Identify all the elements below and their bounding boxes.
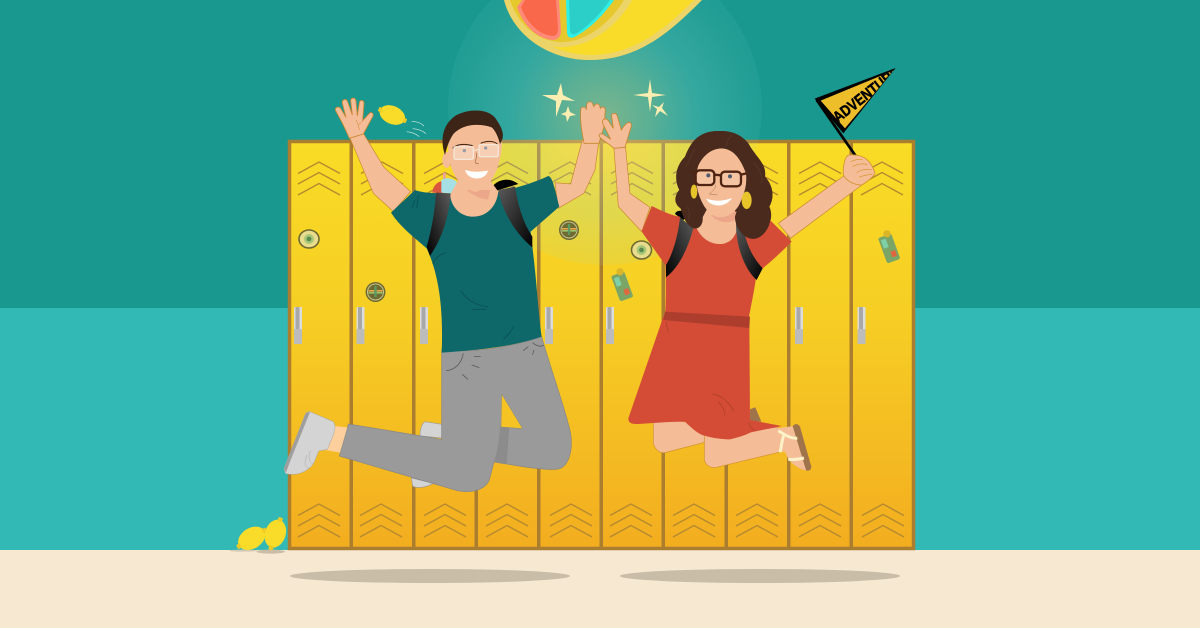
background: lower turquoise wall bbox=[0, 308, 1200, 551]
lemons on floor bbox=[229, 514, 290, 556]
eyes bbox=[706, 173, 710, 177]
eyes bbox=[463, 149, 466, 152]
ankle bbox=[325, 426, 347, 453]
belt bbox=[663, 312, 750, 328]
sparkles bbox=[542, 79, 668, 122]
backpack right strap bbox=[736, 223, 763, 280]
nose bbox=[709, 185, 717, 195]
trouser cuff bbox=[494, 427, 509, 464]
backpack left strap bbox=[666, 217, 693, 277]
back sandal bbox=[750, 407, 761, 422]
nose bbox=[475, 153, 479, 163]
pennant text: ADVENTURE bbox=[830, 64, 903, 126]
glasses bbox=[454, 145, 498, 159]
glasses bbox=[692, 170, 747, 186]
glow behind lemon slice bbox=[448, 0, 762, 265]
backpack top bbox=[675, 211, 707, 223]
skirt bbox=[628, 317, 782, 439]
flag pole bbox=[817, 100, 857, 157]
background: upper teal wall bbox=[0, 0, 1200, 308]
earrings bbox=[691, 185, 697, 199]
trousers silhouette bbox=[339, 337, 571, 492]
front shoe bbox=[284, 412, 335, 474]
bottle on backpack bbox=[432, 181, 443, 193]
man bbox=[284, 98, 605, 492]
right hand bbox=[843, 155, 875, 185]
flying lemon bbox=[375, 101, 426, 137]
sandal straps bbox=[778, 431, 804, 460]
eyebrows bbox=[453, 141, 497, 148]
hair top and side locks bbox=[676, 131, 772, 239]
hair back bbox=[675, 131, 772, 238]
ear bbox=[442, 152, 451, 168]
background: cream floor bbox=[0, 550, 1200, 628]
front leg bbox=[704, 427, 782, 468]
backpack shoulder bbox=[491, 180, 518, 192]
left arm bbox=[349, 133, 411, 212]
neck bbox=[697, 207, 738, 244]
woman lower: skirt and legs bbox=[628, 312, 811, 471]
t-shirt bbox=[391, 176, 559, 353]
face bbox=[448, 121, 502, 192]
back shoe bbox=[411, 422, 447, 487]
smile bbox=[465, 170, 488, 179]
hair bbox=[442, 110, 503, 155]
smile bbox=[706, 198, 732, 205]
gap between legs bbox=[501, 394, 523, 429]
neck bbox=[450, 180, 498, 217]
skirt folds bbox=[666, 322, 755, 431]
woman bbox=[599, 64, 903, 453]
lemon slice at top bbox=[504, 0, 702, 60]
backpack left strap bbox=[427, 193, 451, 256]
left arm bbox=[613, 140, 650, 232]
right arm bbox=[555, 140, 599, 208]
sandal sole bbox=[793, 424, 811, 471]
trouser creases bbox=[446, 343, 544, 379]
foot bbox=[777, 426, 810, 471]
left hand bbox=[599, 113, 631, 148]
motion lines bbox=[407, 121, 426, 137]
back leg bbox=[653, 407, 761, 453]
man: upper body bbox=[335, 98, 605, 353]
backpack right strap bbox=[498, 187, 532, 247]
stickers on lockers bbox=[299, 220, 900, 302]
red dress upper bbox=[642, 206, 792, 320]
lockers bbox=[290, 141, 914, 549]
left hand bbox=[335, 98, 373, 138]
right arm bbox=[778, 175, 863, 238]
man: legs and shoes bbox=[284, 337, 571, 492]
face bbox=[696, 148, 746, 217]
shirt creases bbox=[412, 195, 514, 339]
shadow under man bbox=[290, 569, 570, 583]
right hand bbox=[581, 102, 605, 143]
pennant bbox=[814, 68, 896, 134]
shadow under woman bbox=[620, 569, 900, 583]
hair highlights bbox=[686, 135, 762, 220]
